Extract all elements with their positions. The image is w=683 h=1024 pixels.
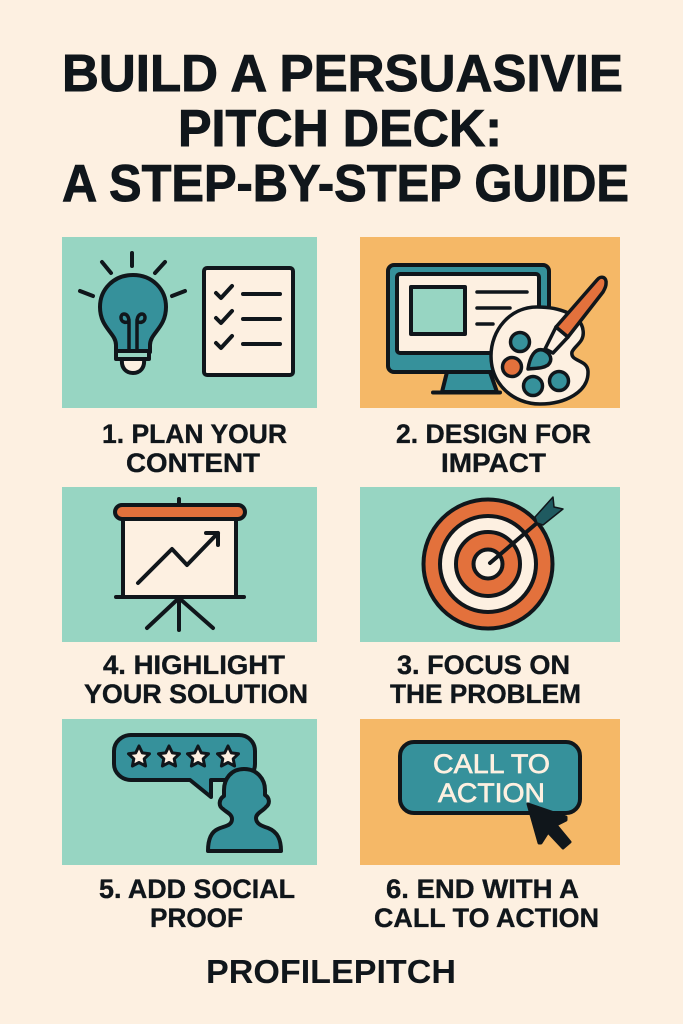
- footer brand name: PROFILEPITCH: [206, 953, 456, 990]
- icon: computer monitor: [388, 265, 549, 392]
- icon: person silhouette: [208, 769, 281, 851]
- icon: light bulb: [80, 253, 185, 373]
- label: step 2: IMPACT: [441, 448, 546, 478]
- label: step 6: CALL TO ACTION: [374, 903, 599, 933]
- label: step 3: THE PROBLEM: [390, 679, 581, 709]
- icon: call to action button: [400, 742, 580, 813]
- title: PITCH DECK:: [178, 100, 502, 158]
- label: step 3: 3. FOCUS ON: [397, 650, 570, 680]
- icon: presentation screen with chart: [115, 499, 245, 630]
- label: step 2: [396, 419, 591, 478]
- icon: call to action button: ACTION: [438, 778, 545, 808]
- label: step 4: [84, 650, 308, 709]
- label: step 4: YOUR SOLUTION: [84, 679, 308, 709]
- label: step 3: [390, 650, 581, 709]
- title: [62, 45, 629, 213]
- icon: call to action button: CALL TO: [433, 749, 550, 779]
- panel: step 4 highlight your solution: [62, 487, 317, 642]
- icon: checklist: [204, 268, 293, 375]
- label: step 5: 5. ADD SOCIAL: [99, 874, 295, 904]
- panel: step 3 focus on the problem: [360, 487, 620, 642]
- label: step 1: 1. PLAN YOUR: [102, 419, 287, 449]
- label: step 1: [102, 419, 287, 478]
- title: BUILD A PERSUASIVIE: [62, 45, 623, 103]
- panel: step 2 design for impact: [360, 237, 620, 408]
- label: step 5: [99, 874, 295, 933]
- label: step 6: [374, 874, 599, 933]
- label: step 4: 4. HIGHLIGHT: [103, 650, 285, 680]
- label: step 6: 6. END WITH A: [386, 874, 579, 904]
- label: step 5: PROOF: [150, 903, 243, 933]
- panel: step 6 end with a call to action: [360, 719, 620, 865]
- panel: step 5 add social proof: [62, 719, 317, 865]
- icon: mouse cursor: [528, 804, 570, 848]
- label: step 2: 2. DESIGN FOR: [396, 419, 591, 449]
- icon: target with arrow: [424, 497, 563, 628]
- label: step 1: CONTENT: [126, 448, 260, 478]
- icon: paint palette and brush: [491, 277, 606, 404]
- panel: step 1 plan your content: [62, 237, 317, 408]
- icon: review speech bubble with stars: [114, 735, 255, 797]
- title: A STEP-BY-STEP GUIDE: [62, 155, 629, 213]
